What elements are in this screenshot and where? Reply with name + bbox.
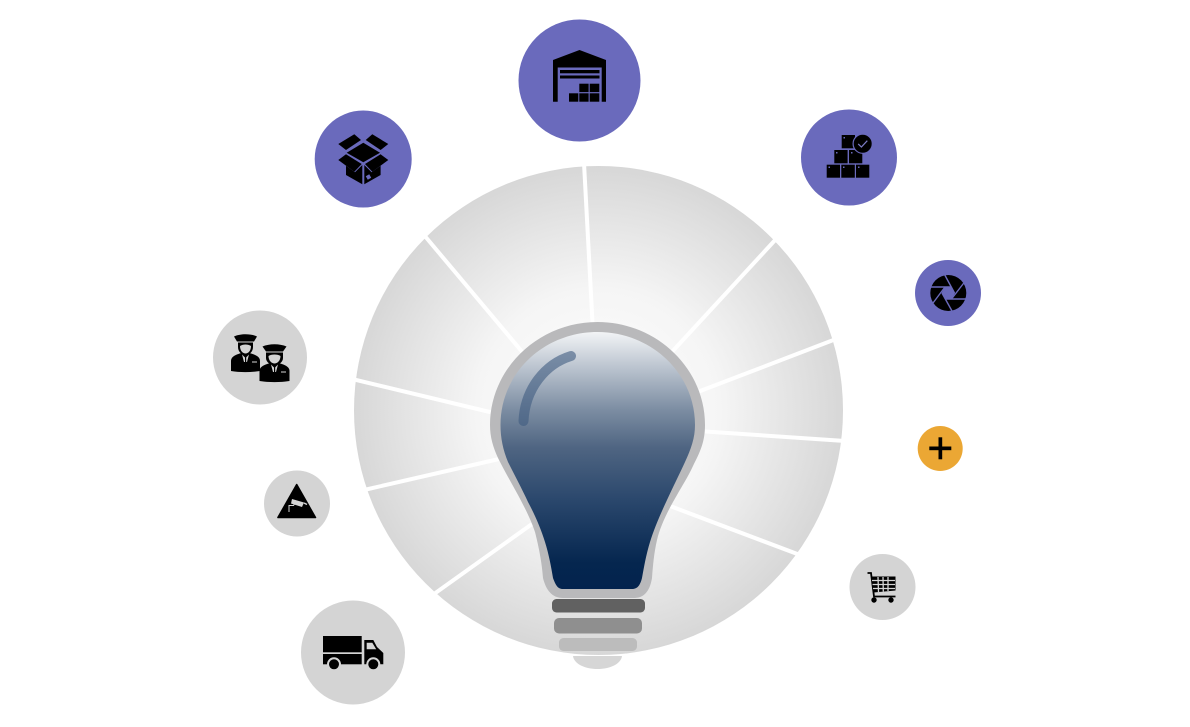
officer one xyxy=(231,334,260,372)
icon: open box xyxy=(315,110,412,208)
bulb tip xyxy=(573,656,622,669)
bulb base ring 1 xyxy=(552,599,645,612)
officer two xyxy=(260,344,290,382)
radial segmented disk xyxy=(352,163,845,655)
bulb glass xyxy=(500,332,695,589)
icon: warehouse xyxy=(518,20,640,142)
icon: stacked boxes with check xyxy=(801,110,897,206)
bulb outer casing xyxy=(490,322,705,598)
icon: security officers xyxy=(213,310,307,404)
bulb base ring 2 xyxy=(554,618,642,634)
light bulb xyxy=(490,322,705,669)
icon: shopping cart xyxy=(850,554,916,620)
icon: plus xyxy=(918,426,963,471)
icon: camera aperture xyxy=(915,260,981,326)
icon: surveillance camera warning xyxy=(264,470,330,536)
glass highlight xyxy=(524,356,571,421)
bulb base ring 3 xyxy=(559,638,637,651)
icon: delivery truck xyxy=(301,600,405,704)
